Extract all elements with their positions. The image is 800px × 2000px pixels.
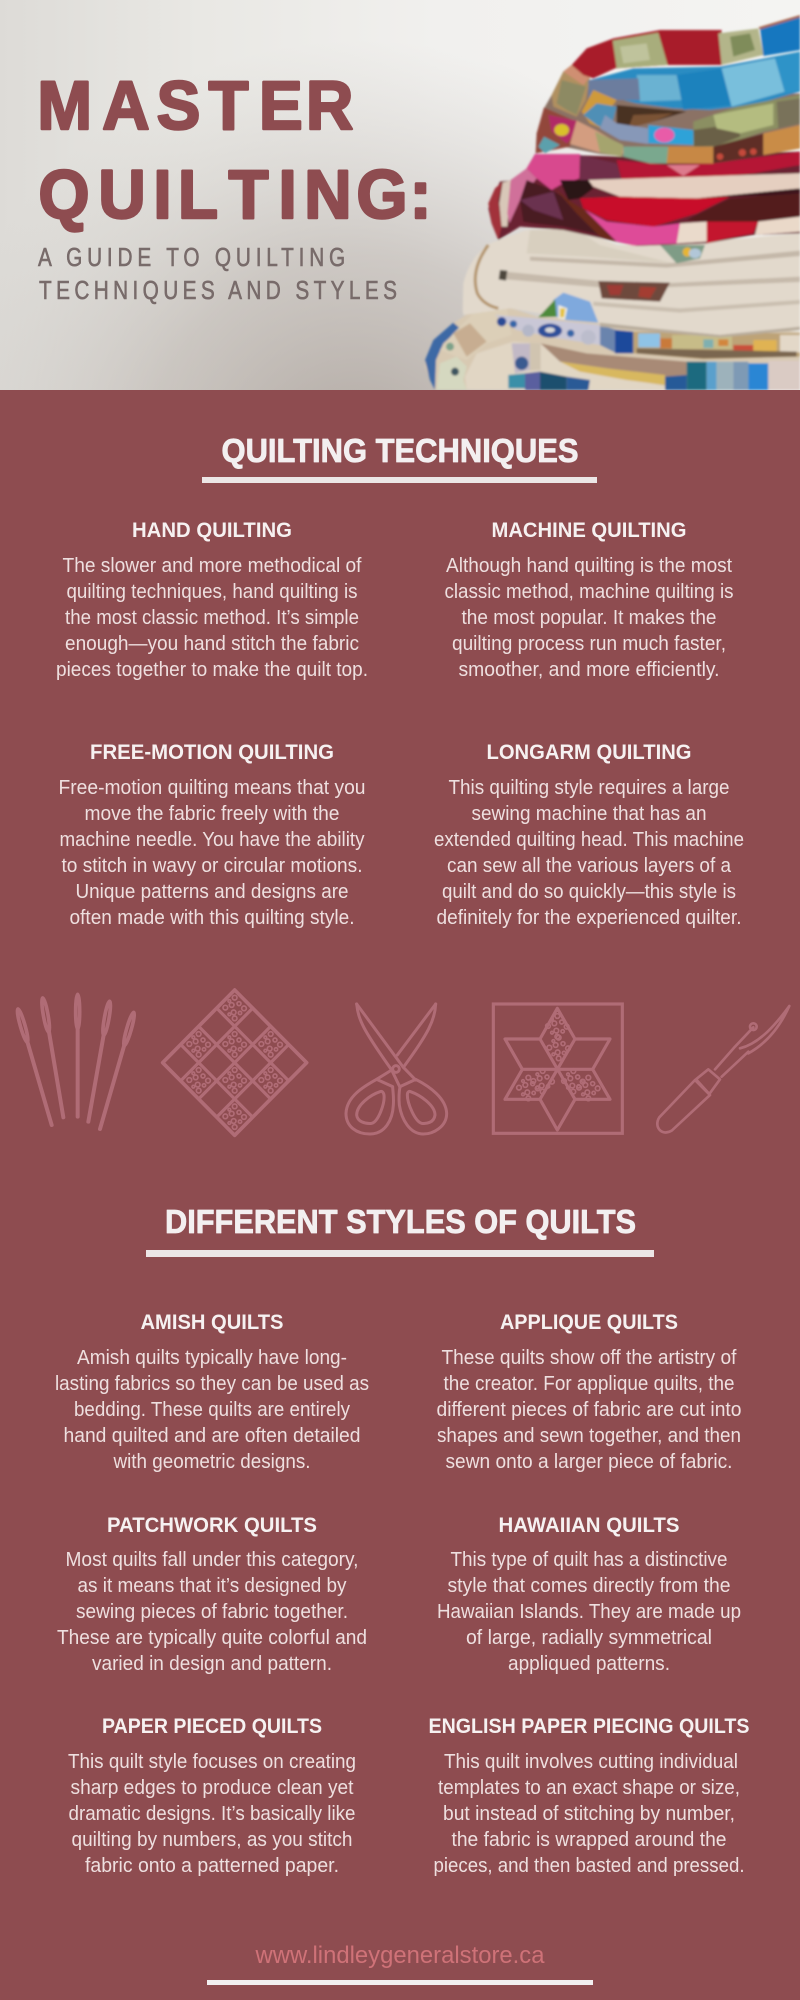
footer rule <box>207 1980 593 1985</box>
block: English Paper Piecing Quilts: pieces, and then basted and pressed. <box>434 1855 744 1877</box>
block: Hawaiian Quilts: HAWAIIAN QUILTS <box>498 1514 680 1537</box>
block: Free-Motion Quilting <box>58 741 366 929</box>
block: Applique Quilts: different pieces of fabric are cut into <box>436 1399 742 1421</box>
block: Applique Quilts <box>436 1311 742 1473</box>
block: Amish Quilts: lasting fabrics so they can be used as <box>55 1373 369 1395</box>
block: Free-Motion Quilting: FREE-MOTION QUILTING <box>90 741 334 764</box>
block: Free-Motion Quilting: machine needle. You have the ability <box>60 829 364 851</box>
block: Hawaiian Quilts: of large, radially symmetrical <box>466 1627 712 1649</box>
block: Longarm Quilting: This quilting style requires a large <box>448 777 730 799</box>
block: Paper Pieced Quilts: sharp edges to produce clean yet <box>70 1777 354 1799</box>
icon: diamond quilt block <box>163 990 307 1135</box>
section heading: Different Styles of Quilts <box>146 1203 654 1257</box>
block: Hawaiian Quilts <box>437 1514 741 1675</box>
block: English Paper Piecing Quilts: but instead of stitching by number, <box>443 1803 735 1825</box>
block: Machine Quilting: Although hand quilting is the most <box>446 555 732 577</box>
subtitle: TECHNIQUES AND STYLES <box>39 276 397 305</box>
block: Patchwork Quilts <box>57 1514 367 1675</box>
block: English Paper Piecing Quilts: the fabric is wrapped around the <box>452 1829 726 1851</box>
subtitle <box>38 243 397 305</box>
block: Applique Quilts: APPLIQUE QUILTS <box>500 1311 678 1334</box>
block: Machine Quilting: smoother, and more efficiently. <box>458 659 720 681</box>
icon: scissors <box>346 1004 447 1134</box>
block: Applique Quilts: These quilts show off the artistry of <box>442 1347 737 1369</box>
block: Patchwork Quilts: These are typically quite colorful and <box>57 1627 367 1649</box>
block: Hand Quilting: pieces together to make the quilt top. <box>56 659 368 681</box>
block: Hand Quilting: enough—you hand stitch the fabric <box>65 633 359 655</box>
block: Free-Motion Quilting: Unique patterns and designs are <box>76 881 348 903</box>
block: Hawaiian Quilts: This type of quilt has a distinctive <box>450 1549 728 1571</box>
block: Longarm Quilting: extended quilting head. This machine <box>434 829 744 851</box>
subtitle: A GUIDE TO QUILTING <box>38 243 345 272</box>
block: Amish Quilts: Amish quilts typically have long- <box>77 1347 347 1369</box>
section heading: Different Styles of Quilts: DIFFERENT STYLES OF QUILTS <box>165 1203 636 1240</box>
block: Free-Motion Quilting: Free-motion quilting means that you <box>58 777 366 799</box>
block: Amish Quilts <box>55 1311 369 1473</box>
block: Paper Pieced Quilts: This quilt style focuses on creating <box>68 1751 356 1773</box>
block: Applique Quilts: shapes and sewn together, and then <box>437 1425 741 1447</box>
block: Patchwork Quilts: Most quilts fall under this category, <box>66 1549 358 1571</box>
red and pink satin quilt <box>488 152 800 246</box>
block: English Paper Piecing Quilts <box>428 1715 750 1877</box>
block: Applique Quilts: sewn onto a larger piece of fabric. <box>446 1451 732 1473</box>
block: Patchwork Quilts: varied in design and pattern. <box>92 1653 332 1675</box>
cream quilt <box>463 228 800 337</box>
block: Longarm Quilting: LONGARM QUILTING <box>486 741 692 764</box>
block: Paper Pieced Quilts: PAPER PIECED QUILTS <box>102 1715 322 1738</box>
section heading: Quilting Techniques <box>202 432 597 483</box>
block: Paper Pieced Quilts: quilting by numbers, as you stitch <box>72 1829 352 1851</box>
block: English Paper Piecing Quilts: This quilt involves cutting individual <box>444 1751 738 1773</box>
icon row <box>16 990 789 1135</box>
block: Paper Pieced Quilts: dramatic designs. It’s basically like <box>68 1803 356 1825</box>
block: Amish Quilts: AMISH QUILTS <box>140 1311 284 1334</box>
footer website link: www.lindleygeneralstore.ca <box>255 1942 545 1969</box>
block: Amish Quilts: hand quilted and are often detailed <box>64 1425 360 1447</box>
block: Hand Quilting: quilting techniques, hand quilting is <box>66 581 358 603</box>
block: Machine Quilting: quilting process run much faster, <box>452 633 726 655</box>
block: Free-Motion Quilting: move the fabric freely with the <box>84 803 340 825</box>
block: English Paper Piecing Quilts: templates to an exact shape or size, <box>438 1777 740 1799</box>
block: Hand Quilting: HAND QUILTING <box>132 519 292 542</box>
block: Amish Quilts: with geometric designs. <box>113 1451 310 1473</box>
block: Patchwork Quilts: PATCHWORK QUILTS <box>107 1514 317 1537</box>
block: Hawaiian Quilts: Hawaiian Islands. They are made up <box>437 1601 741 1623</box>
block: Machine Quilting: MACHINE QUILTING <box>492 519 686 542</box>
block: Hand Quilting: the most classic method. It’s simple <box>65 607 359 629</box>
block: Machine Quilting: the most popular. It makes the <box>462 607 716 629</box>
block: Machine Quilting: classic method, machine quilting is <box>444 581 734 603</box>
banner wall background <box>0 0 800 390</box>
icon: seam ripper <box>657 1006 789 1132</box>
block: Longarm Quilting <box>434 741 744 929</box>
header banner <box>0 0 800 390</box>
block: Free-Motion Quilting: to stitch in wavy or circular motions. <box>62 855 362 877</box>
title line: MASTER: MASTER <box>37 67 353 144</box>
title <box>37 67 431 233</box>
icon: sewing needles <box>16 994 136 1129</box>
bottom patchwork quilt <box>425 307 800 390</box>
block: Hawaiian Quilts: appliqued patterns. <box>508 1653 670 1675</box>
block: Hand Quilting <box>56 519 368 681</box>
block: Hand Quilting: The slower and more methodical of <box>62 555 362 577</box>
section heading: Quilting Techniques: QUILTING TECHNIQUES <box>222 432 578 469</box>
block: Paper Pieced Quilts: fabric onto a patterned paper. <box>85 1855 339 1877</box>
photo: stack of folded quilts <box>425 15 800 390</box>
block: English Paper Piecing Quilts: ENGLISH PAPER PIECING QUILTS <box>428 1715 750 1738</box>
block: Longarm Quilting: definitely for the experienced quilter. <box>436 907 742 929</box>
block: Paper Pieced Quilts <box>68 1715 356 1877</box>
block: Machine Quilting <box>444 519 734 681</box>
block: Amish Quilts: bedding. These quilts are entirely <box>74 1399 350 1421</box>
block: Hawaiian Quilts: style that comes directly from the <box>448 1575 730 1597</box>
block: Free-Motion Quilting: often made with this quilting style. <box>70 907 354 929</box>
block: Longarm Quilting: can sew all the various layers of a <box>447 855 732 877</box>
block: Applique Quilts: the creator. For applique quilts, the <box>444 1373 734 1395</box>
block: Patchwork Quilts: sewing pieces of fabric together. <box>76 1601 348 1623</box>
block: Longarm Quilting: sewing machine that has an <box>472 803 706 825</box>
block: Longarm Quilting: quilt and do so quickly—this style is <box>442 881 736 903</box>
block: Patchwork Quilts: as it means that it’s designed by <box>78 1575 346 1597</box>
title line: QUILTING:: QUILTING: <box>38 156 431 233</box>
top patchwork quilt <box>536 15 800 163</box>
icon: star quilt block <box>493 1004 622 1133</box>
